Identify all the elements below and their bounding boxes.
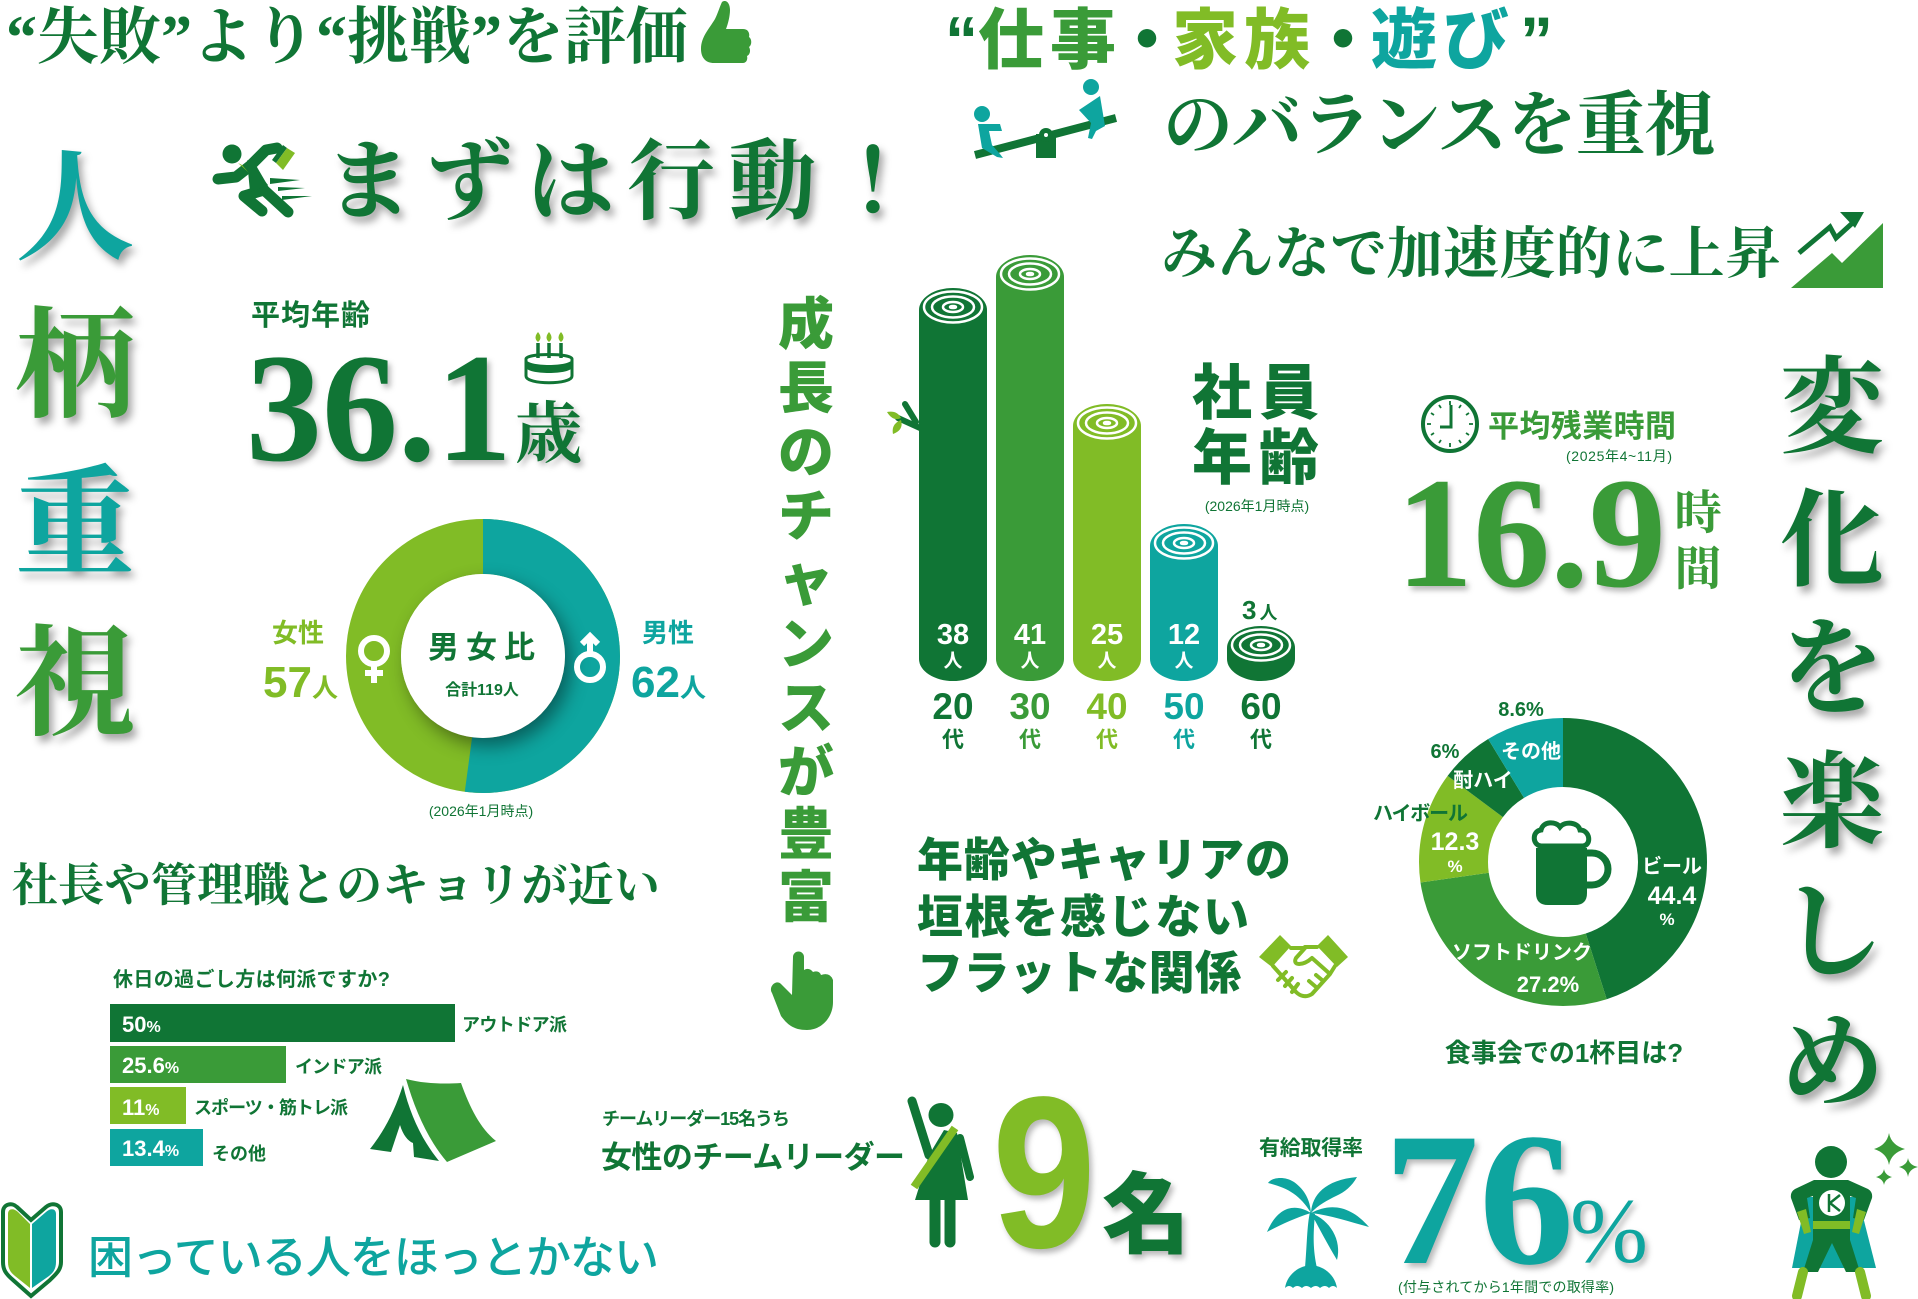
- heading vertical: enjoy change: 変: [1779, 350, 1888, 467]
- heading: action first: まずは行動！: [325, 135, 917, 232]
- heading: close to management: 社長や管理職とのキョリが近い: [12, 860, 660, 911]
- donut labels: 6%: [1431, 741, 1460, 763]
- stat: women team leaders: チームリーダー15名うち: [602, 1108, 790, 1129]
- donut labels: %: [1659, 910, 1675, 929]
- label: female count: 女性: [272, 618, 324, 648]
- stat: nine: [992, 1051, 1190, 1293]
- icon: male symbol: [582, 636, 598, 654]
- log: 50s: 代: [1173, 727, 1195, 752]
- stat: average overtime: 平均残業時間: [1488, 409, 1676, 444]
- stat: nine: 9: [992, 1051, 1096, 1293]
- label: female count: [263, 618, 338, 707]
- text block: flat relationships: フラットな関係: [917, 947, 1241, 999]
- log: 60s: 3人: [1242, 595, 1277, 625]
- icon: thumbs up: [701, 1, 751, 63]
- stat: women team leaders: 女性のチームリーダー: [601, 1140, 905, 1175]
- bar: outdoor: [110, 1004, 567, 1042]
- log: 40s: [1073, 404, 1141, 752]
- heading vertical: growth chance: [778, 293, 834, 929]
- heading vertical: growth chance: 長: [778, 357, 834, 420]
- donut labels: ビール: [1642, 855, 1702, 878]
- label: female count: 57人: [263, 658, 338, 707]
- log: 20s: [919, 288, 987, 752]
- icon: woman with sash: [912, 1101, 970, 1242]
- icon: palm tree: [1267, 1177, 1369, 1288]
- heading: work family play: 遊び: [1371, 3, 1515, 77]
- icon: rising chart: [1791, 212, 1883, 288]
- stat: average overtime: (2025年4~11月): [1566, 448, 1672, 464]
- log: 50s: 50: [1163, 686, 1205, 727]
- heading: employee age: 社員: [1192, 360, 1326, 427]
- heading vertical: enjoy change: 化: [1779, 483, 1885, 600]
- icon: handshake: [1259, 935, 1348, 996]
- chart: holiday bars: 休日の過ごし方は何派ですか?: [113, 967, 390, 991]
- icon: tent: [370, 1079, 496, 1162]
- heading vertical: growth chance: 豊: [778, 803, 834, 866]
- heading: work family play: “: [945, 3, 978, 77]
- donut labels: 酎ハイ: [1453, 769, 1513, 792]
- donut centre label: 男女比: [428, 630, 542, 665]
- heading: employee age: [1192, 360, 1326, 514]
- stat: average age: 歳: [515, 398, 582, 472]
- log: 30s: 代: [1019, 727, 1041, 752]
- log: 20s: 20: [932, 686, 974, 727]
- stat: average overtime: 16.9: [1396, 446, 1666, 621]
- note: paid leave definition: (付与されてから1年間での取得率): [1398, 1279, 1614, 1295]
- stat: women team leaders: [601, 1108, 905, 1175]
- log: 30s: 30: [1009, 686, 1051, 727]
- heading: work family play: 仕事: [978, 3, 1122, 77]
- log: 30s: [996, 255, 1064, 752]
- heading: rising together: みんなで加速度的に上昇: [1161, 224, 1781, 286]
- heading: work family play: [945, 3, 1553, 77]
- text block: flat relationships: 垣根を感じない: [917, 891, 1249, 943]
- heading: employee age: (2026年1月時点): [1205, 498, 1309, 514]
- heading: work family play: ”: [1520, 3, 1553, 77]
- donut labels: 27.2%: [1517, 972, 1579, 997]
- stat: paid leave label: 有給取得率: [1259, 1137, 1363, 1160]
- log: 40s: 代: [1096, 727, 1118, 752]
- donut centre label: [428, 630, 542, 699]
- heading vertical: enjoy change: [1779, 350, 1888, 1122]
- note: gender date: (2026年1月時点): [429, 803, 533, 819]
- caption: first drink question: 食事会での1杯目は?: [1445, 1038, 1683, 1068]
- log: 40s: 人: [1097, 651, 1117, 672]
- icon: pointing hand: [771, 952, 833, 1030]
- chart: holiday bars: [110, 967, 567, 1166]
- log: 60s: 60: [1240, 686, 1282, 727]
- label: male count: 男性: [642, 618, 694, 648]
- bar: outdoor: 50%: [122, 1012, 161, 1037]
- heading vertical: enjoy change: 楽: [1779, 745, 1887, 862]
- bar: indoor: インドア派: [295, 1057, 382, 1077]
- heading vertical: growth chance: ン: [778, 613, 834, 676]
- heading: work family play: ・: [1114, 3, 1180, 77]
- heading vertical: enjoy change: め: [1779, 1005, 1885, 1122]
- icon: beer mug: [1534, 823, 1608, 905]
- bar: other: その他: [212, 1144, 266, 1164]
- heading vertical: growth chance: が: [778, 741, 834, 804]
- label: male count: 62人: [631, 658, 706, 707]
- heading: no one left behind: 困っている人をほっとかない: [88, 1232, 659, 1283]
- text block: flat relationships: 年齢やキャリアの: [917, 834, 1291, 886]
- log: 50s: 人: [1174, 651, 1194, 672]
- log: 30s: 人: [1020, 651, 1040, 672]
- stat: paid leave rate: %: [1570, 1180, 1648, 1282]
- log: 60s: 代: [1250, 727, 1272, 752]
- heading vertical: character first: 柄: [15, 300, 135, 433]
- donut labels: 44.4: [1648, 882, 1696, 910]
- branch and leaf: [887, 404, 920, 434]
- stat: average age: 平均年齢: [251, 299, 370, 332]
- icon: seesaw: [974, 79, 1116, 158]
- log: 20s: 代: [942, 727, 964, 752]
- bar: outdoor: アウトドア派: [462, 1015, 567, 1035]
- heading: work family play: 家族: [1172, 3, 1316, 77]
- icon: birthday cake: [526, 332, 572, 383]
- bar: indoor: [110, 1046, 382, 1083]
- log: 60s: [1227, 595, 1295, 752]
- icon: runner: [218, 144, 312, 212]
- log: 50s: 12: [1168, 619, 1200, 651]
- donut labels: ソフトドリンク: [1452, 941, 1592, 964]
- icon: sparkles: [1874, 1133, 1918, 1185]
- donut centre label: 合計119人: [445, 681, 519, 699]
- heading vertical: character first: 視: [15, 618, 135, 751]
- donut labels: [1373, 699, 1702, 997]
- heading vertical: growth chance: ャ: [778, 549, 834, 612]
- icon: clock: [1423, 397, 1477, 451]
- bar: indoor: 25.6%: [122, 1053, 179, 1078]
- bar: other: [110, 1129, 266, 1166]
- heading vertical: growth chance: ス: [778, 677, 834, 740]
- stat: nine: 名: [1102, 1166, 1190, 1265]
- heading vertical: character first: [15, 143, 135, 751]
- log: 40s: 40: [1086, 686, 1128, 727]
- donut labels: %: [1447, 857, 1463, 876]
- icon: beginner mark: [3, 1204, 61, 1296]
- bar: sports: 11%: [122, 1095, 160, 1120]
- heading vertical: growth chance: 富: [778, 866, 834, 929]
- donut labels: ハイボール: [1373, 802, 1468, 825]
- donut labels: 12.3: [1431, 828, 1479, 856]
- icon: female symbol: [365, 664, 383, 683]
- heading: evaluate challenge over failure: “失敗”より“挑戦”を評価: [6, 4, 688, 72]
- log: 20s: 人: [943, 651, 963, 672]
- log: 50s: [1150, 524, 1218, 752]
- chart: first drink donut: [1373, 699, 1702, 997]
- log: 40s: 25: [1091, 619, 1123, 651]
- heading vertical: character first: 人: [15, 143, 135, 276]
- log: 30s: 41: [1014, 619, 1046, 651]
- text block: flat relationships: [917, 834, 1291, 999]
- heading vertical: enjoy change: し: [1779, 875, 1885, 992]
- bar: sports: スポーツ・筋トレ派: [194, 1097, 348, 1118]
- stat: average overtime: 間: [1674, 544, 1722, 596]
- log: 20s: 38: [937, 619, 969, 651]
- heading vertical: character first: 重: [15, 458, 135, 591]
- heading: balance: のバランスを重視: [1163, 88, 1715, 165]
- chart: gender donut: [361, 546, 603, 766]
- heading vertical: enjoy change: を: [1779, 611, 1885, 728]
- heading vertical: growth chance: の: [778, 421, 834, 484]
- heading: work family play: ・: [1310, 3, 1376, 77]
- donut labels: その他: [1501, 740, 1561, 763]
- stat: paid leave rate: 76: [1384, 1095, 1574, 1299]
- heading vertical: growth chance: チ: [778, 485, 834, 548]
- bar: sports: [110, 1087, 348, 1124]
- donut labels: 8.6%: [1498, 699, 1544, 721]
- chart: employee age logs: [887, 255, 1295, 752]
- icon: hero: [1791, 1146, 1876, 1296]
- heading vertical: growth chance: 成: [778, 293, 834, 356]
- label: male count: [631, 618, 706, 707]
- stat: average overtime: 時: [1674, 488, 1722, 540]
- bar: other: 13.4%: [122, 1136, 179, 1161]
- stat: average age: 36.1: [246, 322, 512, 494]
- heading: employee age: 年齢: [1192, 425, 1326, 492]
